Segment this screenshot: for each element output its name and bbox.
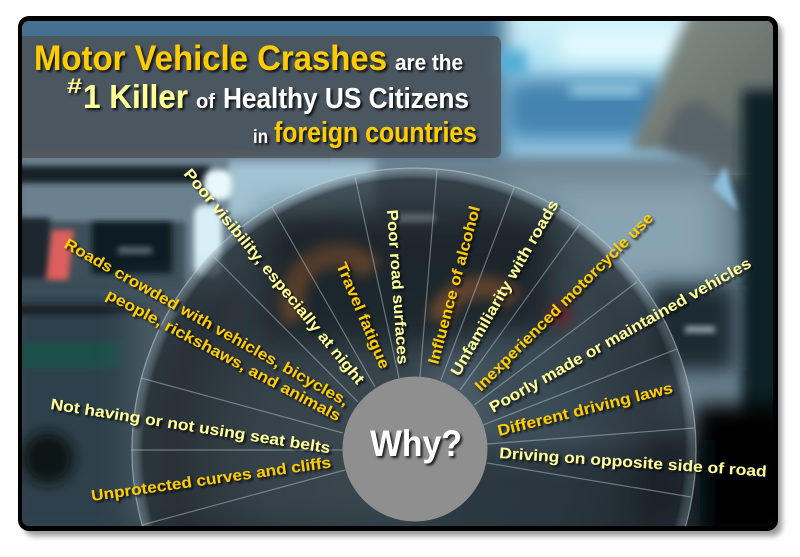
label: inexperienced motorcycle use: Inexperienced motorcycle use xyxy=(472,209,657,395)
label: unprotected curves: Unprotected curves and cliffs xyxy=(90,454,332,505)
label: crowded roads: people, rickshaws, and animals xyxy=(103,287,343,425)
title text: 1 Killer xyxy=(83,78,188,115)
title text: in xyxy=(253,127,268,148)
label: seat belts: Not having or not using seat belts xyxy=(49,396,332,457)
title text xyxy=(34,39,477,149)
title text: foreign countries xyxy=(274,117,477,149)
label: poor road surfaces: Poor road surfaces xyxy=(383,209,411,365)
spoke labels xyxy=(49,166,767,505)
title text: Motor Vehicle Crashes xyxy=(34,39,387,78)
label: poorly made vehicles: Poorly made or maintained vehicles xyxy=(487,255,754,416)
spokes xyxy=(131,170,694,525)
title text: Healthy US Citizens xyxy=(223,83,469,115)
label: driving on opposite side: Driving on opposite side of road xyxy=(499,445,767,481)
title text: of xyxy=(196,91,215,113)
wheel hub xyxy=(342,376,488,522)
label: travel fatigue: Travel fatigue xyxy=(332,260,393,372)
title text: are the xyxy=(395,50,463,75)
label: poor visibility: Poor visibility, especially at night xyxy=(180,166,367,388)
label: crowded roads: Roads crowded with vehicles, bicycles, xyxy=(61,236,351,410)
title text: # xyxy=(67,75,82,98)
hub label: Why?: Why? xyxy=(370,423,462,464)
label: unfamiliarity with roads: Unfamiliarity with roads xyxy=(448,197,562,379)
label: influence of alcohol: Influence of alcohol xyxy=(425,204,484,366)
wheel panel xyxy=(131,168,696,526)
title panel xyxy=(22,36,501,158)
label: different driving laws: Different driving laws xyxy=(496,380,675,440)
